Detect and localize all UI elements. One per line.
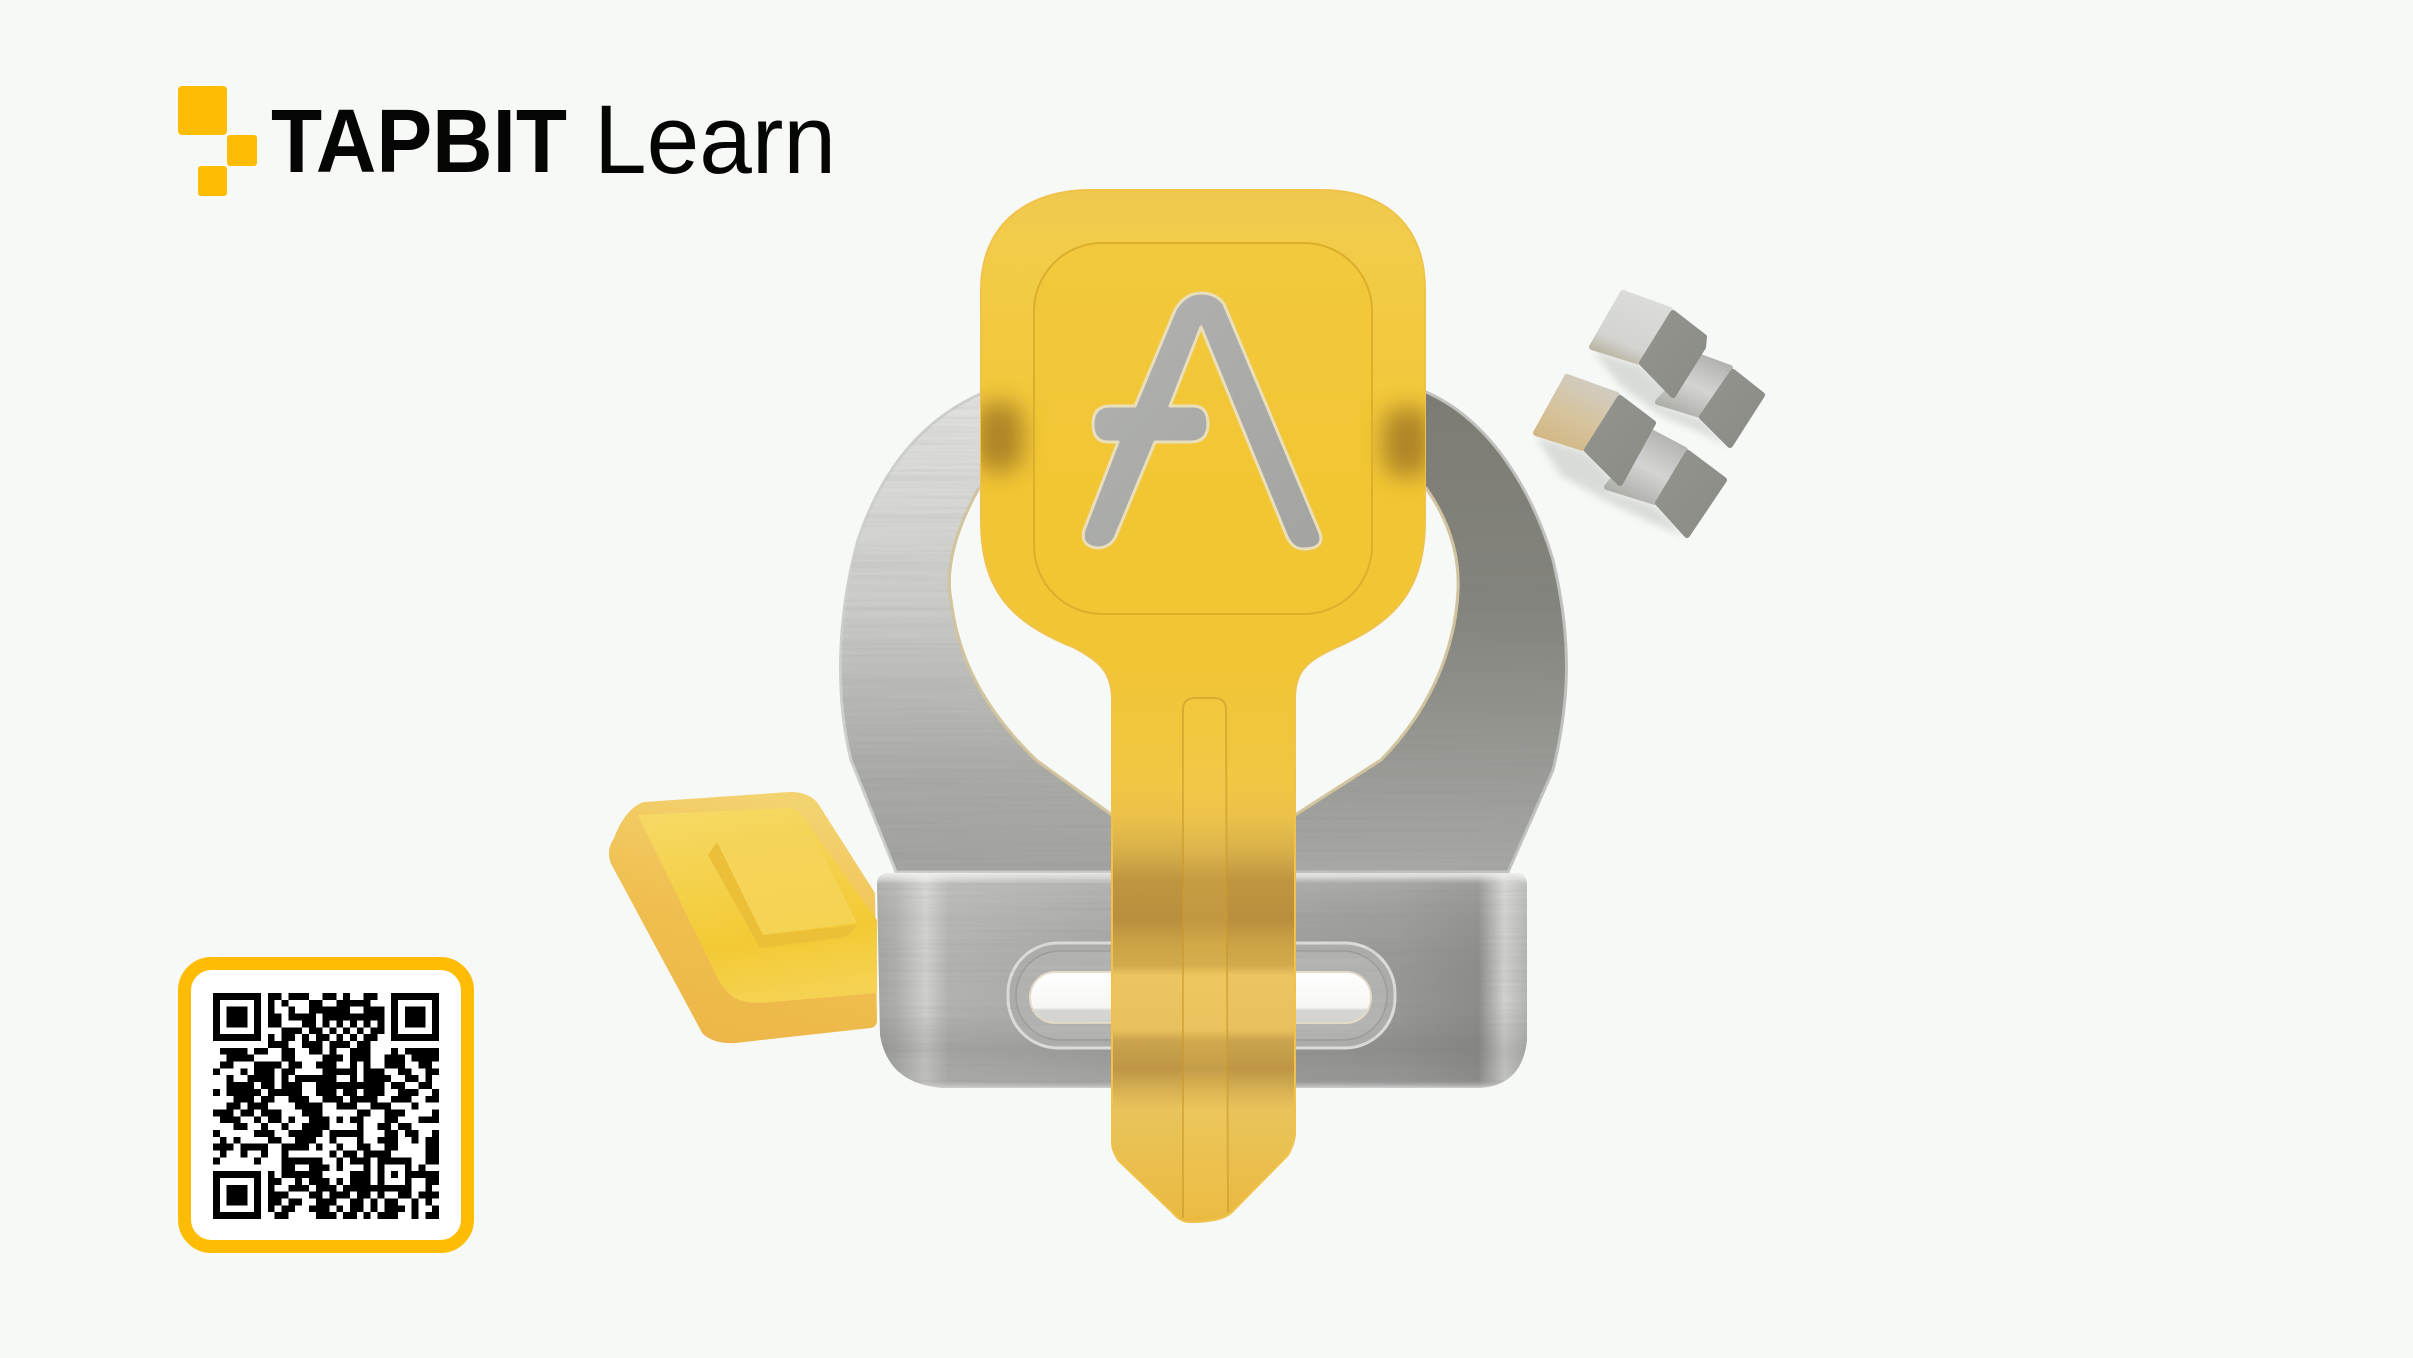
Aave A emblem [1083, 293, 1321, 549]
card frame [184, 964, 468, 1246]
wordmark: TAPBIT: TAPBIT [271, 92, 567, 192]
key body [981, 190, 1425, 1222]
logo: TAPBIT Learn [178, 85, 836, 196]
small yellow tag piece [616, 799, 877, 1036]
oval slot [1008, 943, 1395, 1048]
metal base plate [877, 873, 1527, 1088]
brushed metal texture [842, 407, 1554, 1039]
QR code card [184, 964, 468, 1246]
illustration: Aave key and metal lock [616, 190, 1762, 1222]
metal shackle [841, 392, 1567, 880]
key groove [1183, 698, 1228, 1218]
QR code [213, 993, 439, 1219]
lower cube pair [1536, 377, 1724, 537]
wordmark: Learn: Learn [594, 85, 836, 194]
key head inner panel [1034, 243, 1372, 614]
metal cubes [1536, 293, 1762, 537]
upper cube pair [1592, 293, 1762, 447]
shackle inner rim [949, 488, 1458, 815]
yellow translucent key [975, 190, 1431, 1222]
shadow spots where the shackle passes behind the head [975, 402, 1431, 477]
icon: TAPBIT yellow squares [178, 86, 257, 196]
